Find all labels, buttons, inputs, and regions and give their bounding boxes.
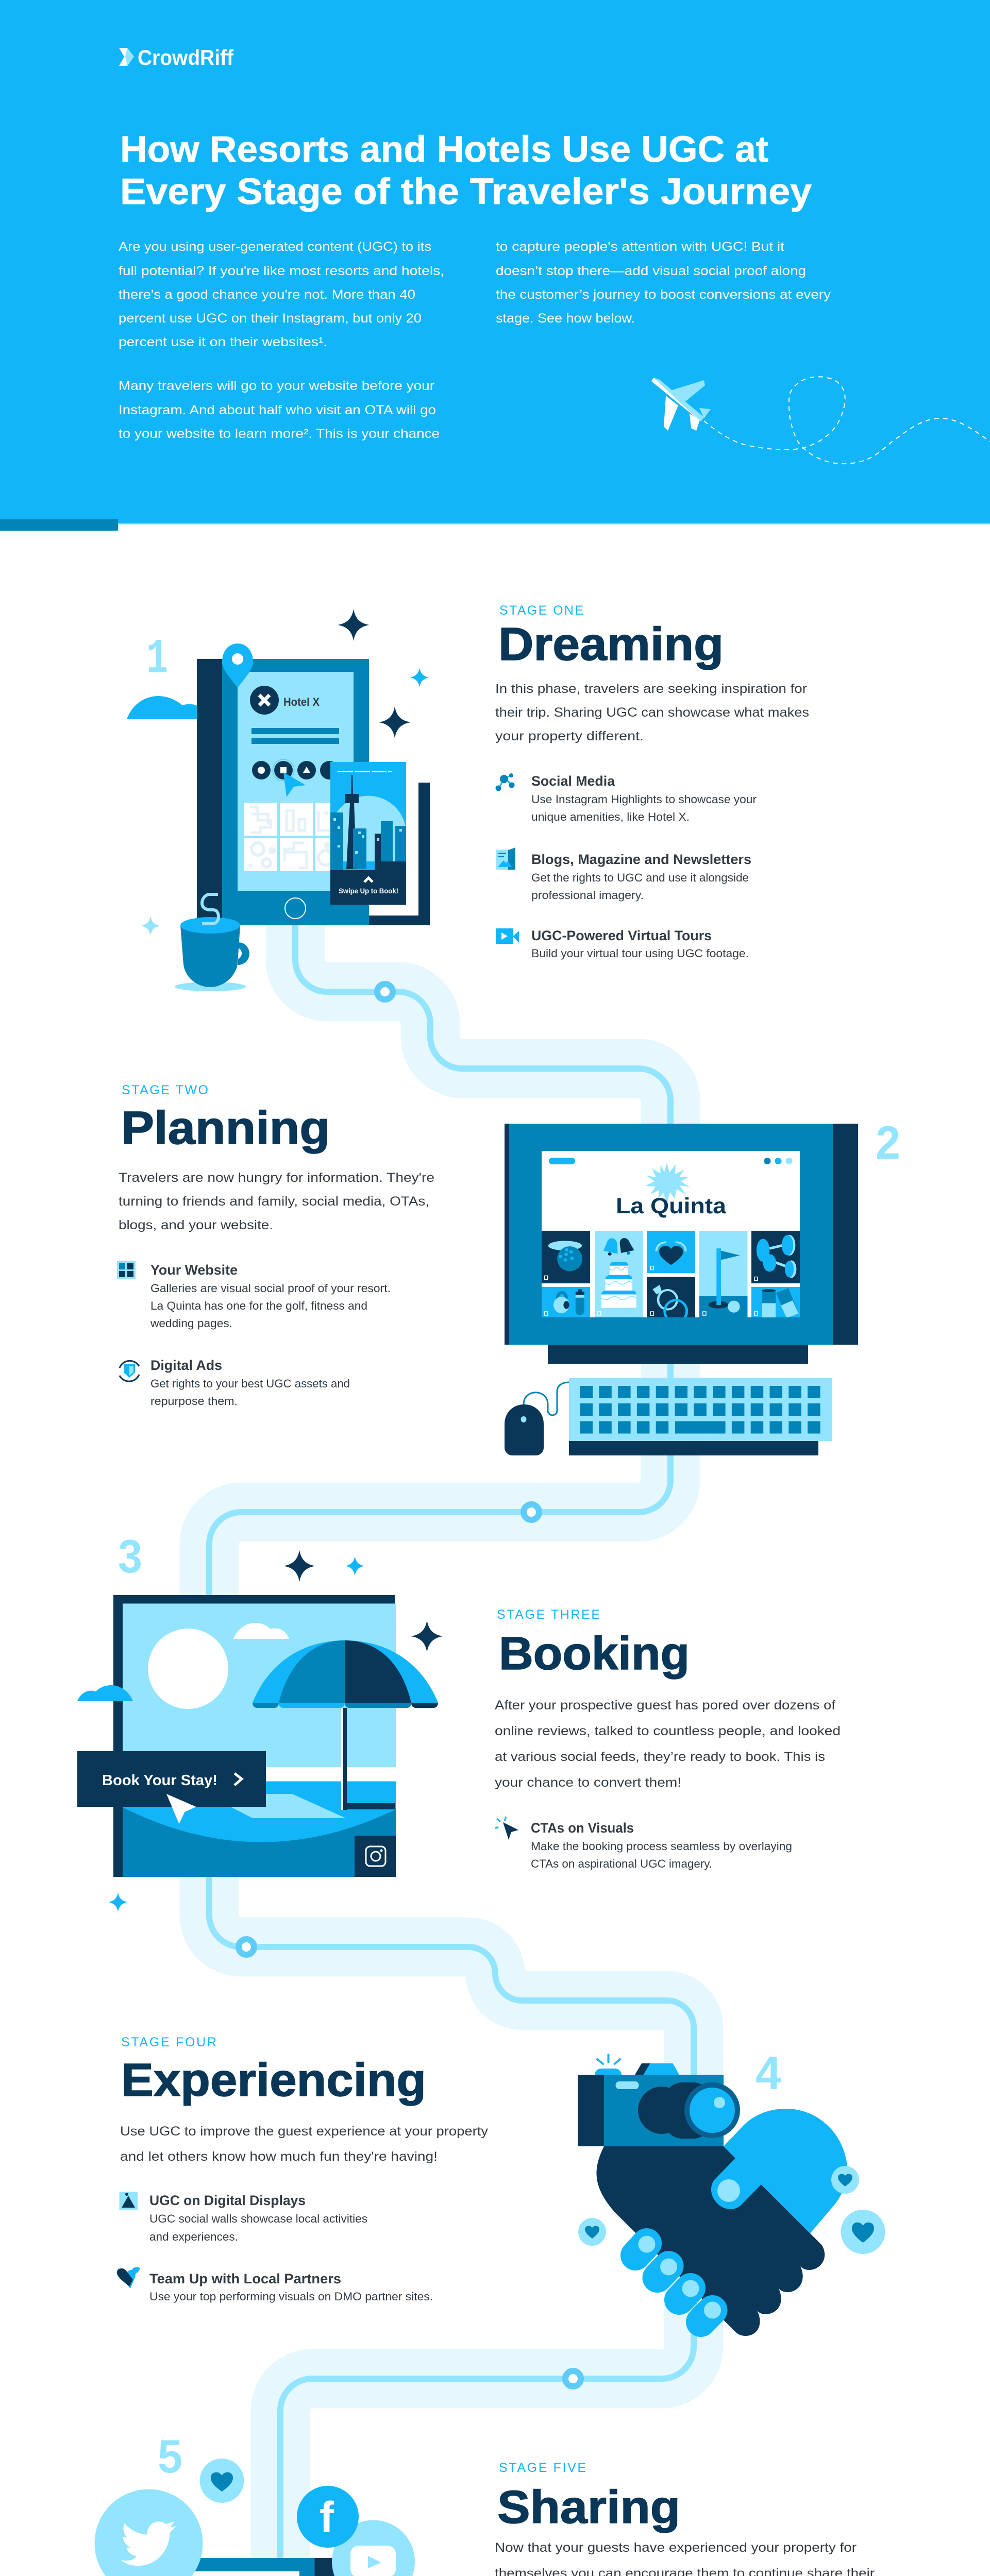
illustration: phone with Hotel X profile [127, 643, 430, 991]
item: Blogs: Get the rights to UGC and use it alongside [531, 871, 749, 884]
icon: partner hearts [117, 2267, 140, 2289]
illustration: phone with social media bubbles [95, 2459, 415, 2576]
decorative stars, stage one [141, 609, 429, 936]
journey road [209, 876, 694, 2576]
call to action: Book Your Stay [77, 1751, 266, 1824]
icon: digital displays [120, 2192, 138, 2210]
illustration: handshake with camera [578, 2055, 885, 2336]
item: Your Website: Your Website [150, 1262, 238, 1278]
intro paragraph: your property different. [495, 729, 644, 743]
heading: Sharing [497, 2482, 680, 2533]
item: Digital Ads: repurpose them. [150, 1395, 238, 1408]
stage label: STAGE TWO [122, 1083, 208, 1097]
stage label: STAGE FIVE [499, 2461, 586, 2475]
intro text: right column: doesn’t stop there—add visual social proof along [496, 264, 806, 278]
item: Team Up with Local Partners [149, 2271, 433, 2303]
item: CTAs on Visuals: Make the booking process seamless by overlaying [531, 1840, 792, 1853]
intro text: left column: full potential? If you're like most resorts and hotels, [119, 264, 444, 278]
keyboard [569, 1378, 832, 1455]
stage label: STAGE FOUR [121, 2035, 216, 2049]
item: Social Media: Use Instagram Highlights to showcase your [531, 793, 757, 806]
item: Your Website: Galleries are visual social proof of your resort. [150, 1282, 391, 1295]
intro text: right column: to capture people's attention with UGC! But it [496, 240, 784, 254]
intro paragraph: Use UGC to improve the guest experience at your property [120, 2124, 489, 2139]
item: Digital Ads: Get rights to your best UGC assets and [150, 1377, 350, 1390]
item: Blogs: Blogs, Magazine and Newsletters [531, 852, 751, 867]
intro paragraph: online reviews, talked to countless people, and looked [495, 1724, 841, 1738]
stage number 1: 1 [146, 631, 168, 687]
item: UGC on Digital Displays: UGC social walls showcase local activities [149, 2212, 367, 2225]
intro paragraph [495, 2540, 875, 2576]
item: Blogs: professional imagery. [531, 889, 644, 902]
panel: stage two text [117, 1083, 434, 1408]
item: UGC on Digital Displays: UGC on Digital Displays [149, 2193, 306, 2208]
illustration: desktop computer with La Quinta site [505, 1124, 858, 1455]
heading: Booking [499, 1628, 690, 1680]
item: Team Up with Local Partners: Team Up with Local Partners [149, 2271, 341, 2286]
stage label: STAGE ONE [499, 603, 583, 618]
intro paragraph: at various social feeds, they’re ready to book. This is [495, 1750, 825, 1764]
icon: digital ads [120, 1361, 139, 1381]
item: UGC on Digital Displays: and experiences. [149, 2230, 238, 2243]
item: Digital Ads: Digital Ads [150, 1358, 222, 1373]
panel: stage five text [495, 2461, 875, 2576]
item: Team Up with Local Partners: Use your top performing visuals on DMO partner sites. [149, 2290, 433, 2303]
intro text: left column: percent use it on their websites¹. [119, 335, 327, 349]
item: UGC-Powered Virtual Tours: Build your virtual tour using UGC footage. [531, 947, 749, 960]
icon: airplane with dashed trail [651, 377, 990, 464]
item: UGC-Powered Virtual Tours [531, 928, 749, 960]
fingers [635, 2243, 712, 2322]
logo: CrowdRiff: CrowdRiff [138, 45, 234, 70]
icon: cloud [127, 696, 210, 719]
item: Social Media [531, 773, 757, 823]
intro paragraph: their trip. Sharing UGC can showcase what makes [495, 705, 809, 720]
panel: stage four text [117, 2035, 489, 2303]
twitter bubble [95, 2489, 203, 2576]
facebook bubble: f [320, 2493, 334, 2541]
intro paragraph: In this phase, travelers are seeking inspiration for [495, 682, 807, 696]
site name: La Quinta [616, 1194, 727, 1218]
item: UGC on Digital Displays [149, 2193, 367, 2243]
item: Social Media: unique amenities, like Hotel X. [531, 810, 690, 823]
heading: Experiencing [121, 2055, 426, 2106]
gallery tile illustrations [545, 1235, 798, 1322]
item: UGC-Powered Virtual Tours: UGC-Powered Virtual Tours [531, 928, 712, 943]
story card: Swipe Up to Book [330, 762, 406, 905]
label: Hotel X: Hotel X [283, 696, 320, 708]
item: CTAs on Visuals [531, 1820, 792, 1870]
icon: blogs [496, 848, 515, 870]
intro paragraph [495, 1698, 841, 1790]
intro paragraph: Now that your guests have experienced your property for [495, 2540, 857, 2555]
mouse [505, 1382, 569, 1455]
icon: white cloud [233, 1623, 289, 1639]
title: Every Stage of the Traveler's Journey [120, 172, 812, 212]
panel: stage one text [495, 603, 809, 960]
story card: Swipe Up to Book: Swipe Up to Book! [339, 887, 398, 895]
heart bubble [200, 2459, 244, 2503]
item: Your Website: La Quinta has one for the golf, fitness and [150, 1299, 367, 1312]
stage number 5: 5 [158, 2431, 182, 2483]
stage label: STAGE THREE [497, 1607, 600, 1622]
intro paragraph [119, 1171, 434, 1232]
item: Your Website: wedding pages. [150, 1317, 232, 1330]
illustration: beach photo with booking call to action [77, 1595, 438, 1877]
icon: website grid [117, 1261, 136, 1279]
blue hand [711, 2109, 847, 2233]
stage number 4: 4 [756, 2047, 781, 2099]
icon: blue cloud [77, 1685, 133, 1701]
panel: stage three text [495, 1607, 841, 1870]
heading: Dreaming [498, 619, 724, 670]
intro text: left column: there's a good chance you're not. More than 40 [119, 287, 415, 302]
intro text: left column: to your website to learn more². This is your chance [119, 427, 440, 441]
intro text: right column [496, 240, 831, 326]
intro paragraph: turning to friends and family, social media, OTAs, [119, 1194, 429, 1209]
icon: coffee cup [175, 894, 249, 991]
item: Blogs [531, 852, 751, 902]
item: Social Media: Social Media [531, 773, 615, 789]
camera [578, 2055, 740, 2146]
instagram badge [355, 1836, 396, 1877]
decorative stars, stage three [108, 1550, 443, 1912]
header band [0, 0, 990, 531]
intro text: left column: Instagram. And about half who visit an OTA will go [119, 403, 436, 417]
intro paragraph: and let others know how much fun they're having! [120, 2149, 438, 2164]
intro paragraph: After your prospective guest has pored over dozens of [495, 1698, 835, 1713]
intro paragraph: blogs, and your website. [119, 1218, 273, 1232]
item: CTAs on Visuals: CTAs on Visuals [531, 1820, 634, 1836]
intro text: left column: Are you using user-generated content (UGC) to its [119, 240, 431, 254]
intro paragraph: your chance to convert them! [495, 1775, 681, 1790]
title [120, 129, 812, 212]
title: How Resorts and Hotels Use UGC at [120, 129, 768, 170]
stage number 2: 2 [876, 1117, 900, 1169]
stage number 3: 3 [118, 1531, 142, 1583]
item: Digital Ads [150, 1358, 350, 1408]
facebook bubble [297, 2486, 359, 2548]
icon: social media [496, 773, 514, 791]
intro paragraph [120, 2124, 489, 2164]
icon: cursor click [495, 1817, 518, 1840]
intro text: left column: Many travelers will go to your website before your [119, 379, 434, 393]
intro text: right column: stage. See how below. [496, 311, 635, 326]
intro paragraph: Travelers are now hungry for information. They're [119, 1171, 434, 1185]
intro paragraph [495, 682, 809, 743]
heart bubbles [578, 2166, 885, 2254]
item: Your Website [150, 1262, 391, 1330]
item: CTAs on Visuals: CTAs on aspirational UGC imagery. [531, 1857, 712, 1870]
youtube bubble [332, 2520, 415, 2576]
beach umbrella [253, 1640, 438, 1810]
call to action: Book Your Stay: Book Your Stay! [102, 1772, 217, 1789]
heading: Planning [121, 1103, 330, 1154]
intro text: left column [119, 240, 444, 441]
intro text: right column: the customer’s journey to boost conversions at every [496, 287, 831, 302]
dark hand [596, 2146, 825, 2336]
icon: video [496, 928, 519, 944]
intro text: left column: percent use UGC on their Instagram, but only 20 [119, 311, 422, 326]
